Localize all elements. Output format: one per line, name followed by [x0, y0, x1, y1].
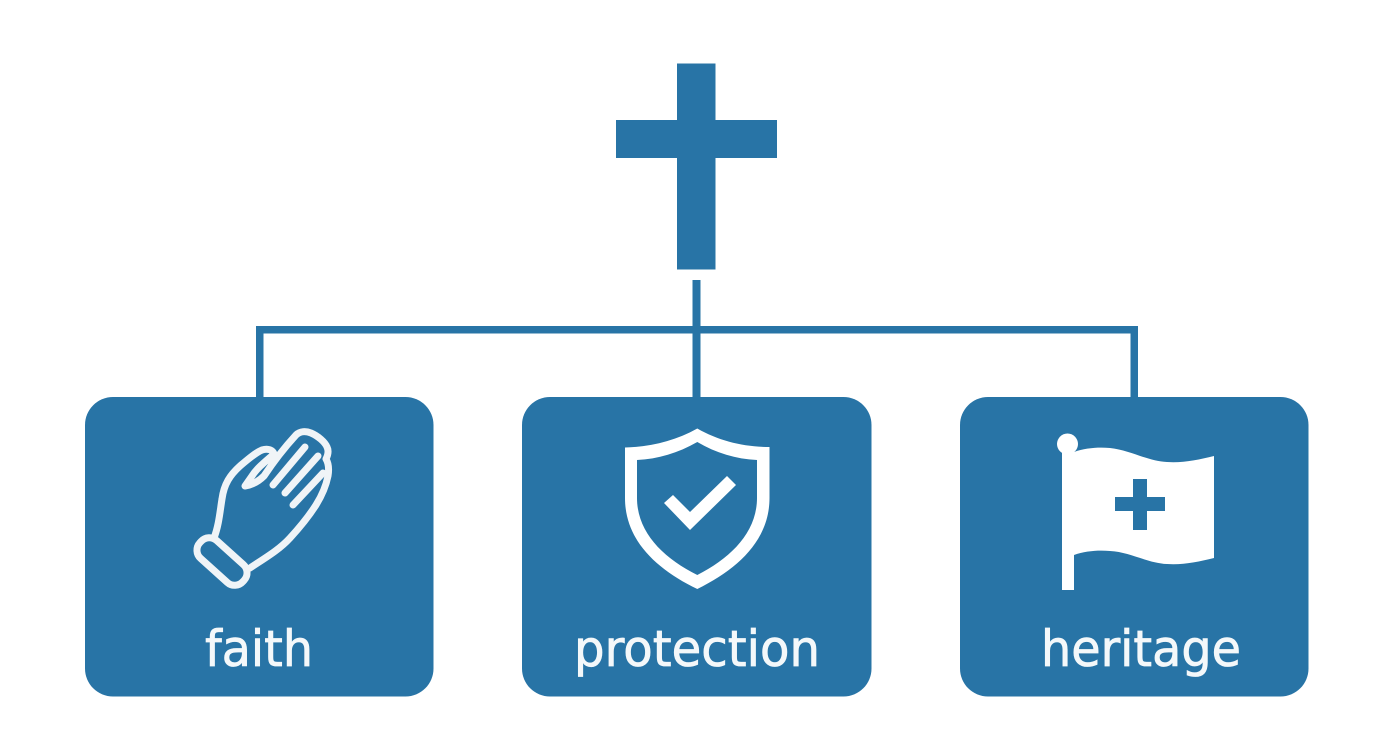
label: faith: faith — [205, 620, 313, 678]
panel: faith — [85, 397, 434, 696]
connector lines — [256, 280, 1138, 397]
icon: shield with check — [625, 428, 770, 589]
icon: flag with cross — [1057, 434, 1214, 590]
panel: heritage — [960, 397, 1308, 696]
panel: protection — [522, 397, 872, 696]
icon: top cross — [616, 64, 777, 270]
icon: praying hands — [192, 432, 329, 590]
label: protection: protection — [574, 620, 820, 678]
label: heritage: heritage — [1041, 620, 1241, 678]
